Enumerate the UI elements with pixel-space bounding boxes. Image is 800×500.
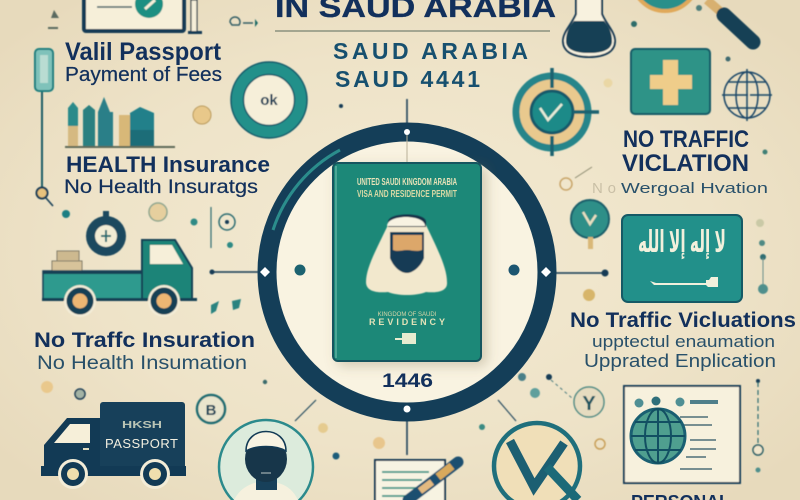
icon: delivery truck with passport label	[41, 402, 186, 489]
passport cover: UNITED SAUDI KINGDOM ARABIA	[357, 177, 457, 188]
heading: health insurance: HEALTH Insurance	[66, 152, 270, 177]
passport cover	[333, 163, 481, 361]
heading: no traffic violation: NO TRAFFIC	[623, 126, 749, 153]
icon: small check badge	[571, 200, 609, 249]
icon: person portrait	[219, 420, 313, 500]
icon: teal ring badge	[231, 62, 307, 138]
icon: flask	[563, 0, 615, 57]
text: personal violation: Wergoal Hvation	[621, 180, 768, 197]
icon: city skyline	[65, 97, 175, 148]
heading: valid passport: Valil Passport	[65, 38, 222, 66]
passport cover: VISA AND RESIDENCE PERMIT	[357, 189, 457, 200]
icon: document with globe	[624, 386, 740, 483]
icon: delivery truck with passport label: PASSPORT	[105, 436, 178, 451]
icon: delivery truck with passport label: HKSH	[122, 420, 162, 431]
text: updated application: Upprated Enplication	[584, 351, 776, 371]
central ring with passport	[260, 129, 551, 412]
icon: wireframe globe	[722, 69, 772, 121]
icon: magnifying glass	[632, 0, 753, 42]
icon: letter badge	[197, 395, 225, 423]
passport cover: KINGDOM OF SAUDI	[378, 312, 437, 318]
icon: pickup truck	[42, 211, 197, 317]
icon: test tube with line	[35, 49, 53, 206]
heading: no traffic violations: No Traffic Vicluations	[570, 309, 796, 332]
heading: no traffic violation: VICLATION	[622, 150, 749, 177]
icon: cross-check circle	[494, 423, 580, 500]
icon: letter badge: B	[206, 402, 217, 419]
text: no health insurance detail: No Health Insumation	[37, 353, 247, 374]
text: no health insurance: No Health Insuratgs	[64, 177, 258, 198]
year label: 1446	[382, 371, 433, 392]
text: updated information: upptectul enaumation	[592, 332, 775, 351]
subtitle line 1: SAUD ARABIA	[333, 38, 528, 64]
icon: saudi flag	[622, 215, 742, 302]
portrait emblem	[366, 214, 447, 295]
passport cover: REVIDENCY	[369, 317, 445, 327]
subtitle line 2: SAUD 4441	[335, 66, 480, 92]
icon: check target	[516, 68, 599, 156]
heading: no traffic violation	[622, 126, 749, 177]
text: personal violation	[592, 180, 768, 197]
icon: medical cross card	[631, 49, 710, 114]
icon: framed certificate with seal	[84, 0, 202, 34]
text: personal violation: No	[592, 180, 616, 197]
heading: no traffic insurance: No Traffc Insuration	[34, 329, 255, 352]
icon: teal ring badge: ok	[260, 92, 278, 109]
infographic canvas: Y	[582, 393, 596, 415]
text: payment of fees: Payment of Fees	[65, 64, 222, 86]
icon: document and pen	[375, 460, 458, 500]
